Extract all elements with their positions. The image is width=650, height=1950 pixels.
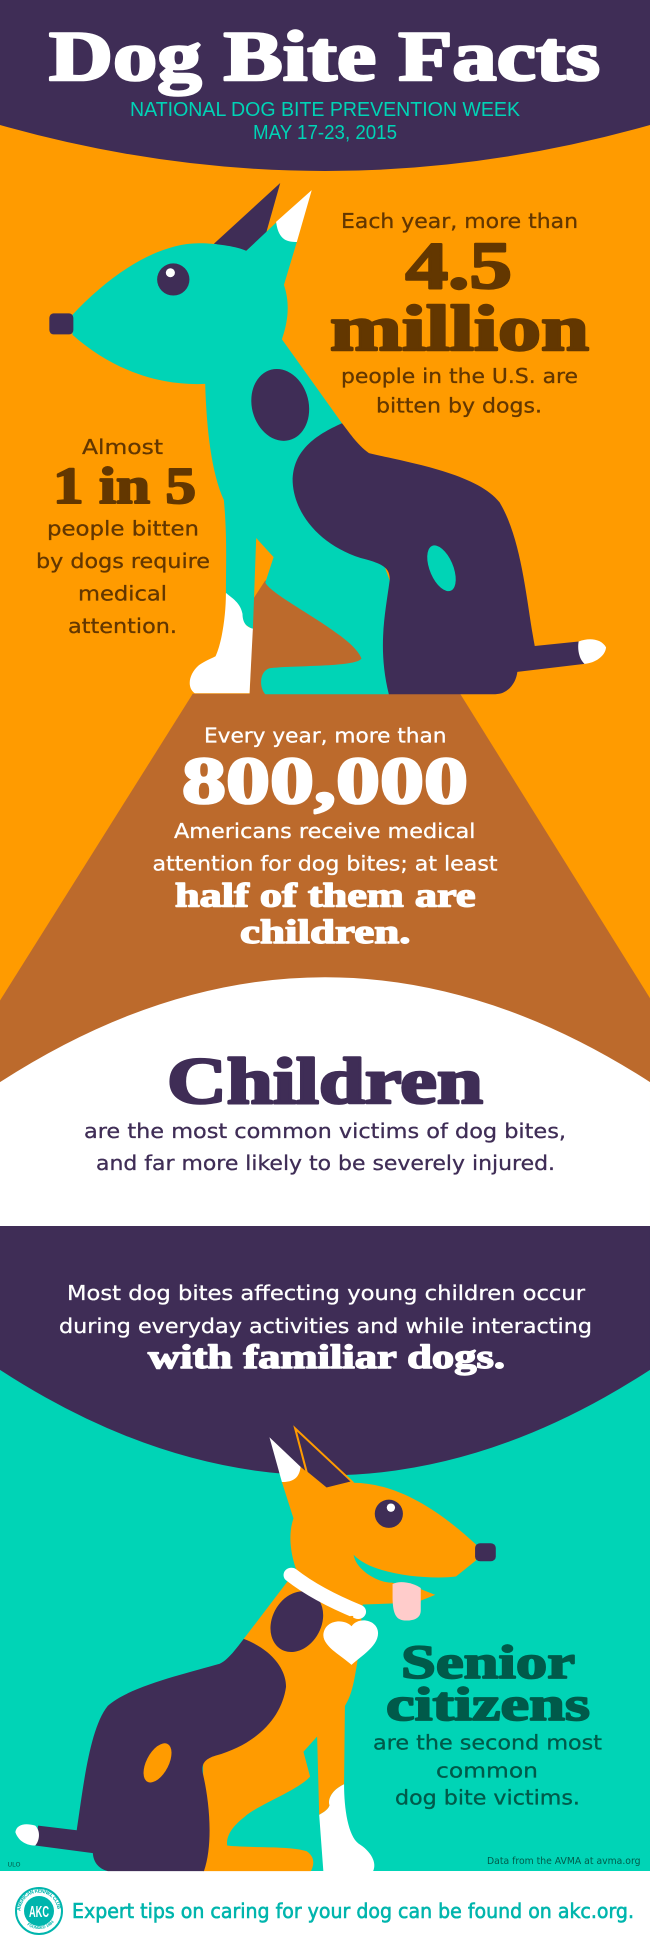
text block: 4.5 million: million (330, 293, 589, 365)
text block: 1 in 5: Almost (82, 435, 163, 459)
orange body (203, 1467, 476, 1871)
text block: senior citizens: citizens (386, 1678, 590, 1731)
front leg white sock (190, 593, 253, 693)
title: Dog Bite Facts (49, 18, 600, 96)
text block: familiar dogs: Most dog bites affecting young children occur (67, 1281, 586, 1305)
eye (157, 263, 189, 296)
orange background (0, 0, 650, 1300)
text block: senior citizens: common (436, 1758, 538, 1782)
near ear tip (269, 1437, 301, 1482)
front leg white sock (319, 1784, 374, 1871)
text block: 4.5 million (330, 209, 589, 418)
text block: children: Children (167, 1045, 483, 1118)
icon: AKC logo: AMERICAN KENNEL CLUB (17, 1889, 61, 1911)
subtitle: MAY 17-23, 2015 (253, 122, 397, 144)
subtitle: NATIONAL DOG BITE PREVENTION WEEK (130, 99, 521, 121)
footer text: Expert tips on caring for your dog can be found on akc.org. (72, 1899, 634, 1923)
eye highlight (166, 268, 175, 277)
text block: 800,000: half of them are (175, 878, 476, 915)
text block: children (84, 1045, 566, 1175)
hip spot (421, 541, 462, 596)
illustration: orange dog (15, 1428, 496, 1871)
text block: familiar dogs: with familiar dogs. (148, 1339, 505, 1376)
eye (375, 1500, 403, 1528)
eye highlight (387, 1503, 395, 1512)
text block: 1 in 5: 1 in 5 (53, 458, 196, 515)
text block: 1 in 5: by dogs require (36, 549, 210, 573)
tail tip (578, 639, 606, 664)
text block: senior citizens: Senior (401, 1636, 575, 1689)
icon: AKC logo: AKC (29, 1904, 49, 1921)
text block: 4.5 million: people in the U.S. are (341, 364, 578, 388)
text block: senior citizens (373, 1636, 602, 1810)
far ear (214, 183, 280, 251)
panel: footer (0, 1871, 650, 1950)
far ear (295, 1428, 352, 1489)
panel: brown triangle (0, 694, 650, 1082)
brown area between legs (250, 580, 373, 696)
text block: 1 in 5: people bitten (47, 517, 199, 541)
panel: purple section (0, 1226, 650, 1476)
text block: 800,000: attention for dog bites; at least (152, 852, 498, 876)
subtitle (130, 99, 521, 144)
purple body patch (293, 423, 585, 694)
tongue (393, 1582, 421, 1621)
source note: Data from the AVMA at avma.org (487, 1856, 640, 1867)
nose (475, 1543, 496, 1561)
tail tip (15, 1824, 39, 1846)
text block: 800,000: children. (240, 914, 410, 951)
illustration: teal dog (49, 183, 606, 696)
nose (49, 313, 73, 334)
near ear tip (276, 190, 312, 242)
panel: teal section (0, 1226, 650, 1871)
icon: AKC logo: FOUNDED 1884 (27, 1920, 54, 1929)
text block: senior citizens: are the second most (373, 1730, 602, 1754)
collar (291, 1575, 358, 1612)
text block: senior citizens: dog bite victims. (395, 1786, 580, 1810)
text block: children: and far more likely to be severely injured. (96, 1151, 555, 1175)
text block: 800,000: Every year, more than (204, 723, 446, 747)
credit: ULO (8, 1862, 21, 1869)
shoulder spot (242, 360, 318, 450)
text block: children: are the most common victims of dog bites, (84, 1119, 566, 1143)
text block: 4.5 million: Each year, more than (341, 209, 578, 233)
text block: 1 in 5 (36, 435, 210, 638)
panel: header (0, 0, 650, 171)
text block: 1 in 5: medical (78, 582, 167, 606)
icon: AKC logo (15, 1887, 63, 1935)
shoulder spot (261, 1584, 333, 1659)
text block: 1 in 5: attention. (68, 614, 177, 638)
text block: 4.5 million: bitten by dogs. (376, 394, 542, 418)
text block: familiar dogs (59, 1281, 592, 1376)
hip spot (138, 1739, 177, 1786)
panel: white children section (0, 977, 650, 1230)
teal body (73, 222, 390, 694)
purple body patch (35, 1639, 286, 1871)
text block: 800,000: Americans receive medical (174, 819, 476, 843)
text block: 4.5 million: 4.5 (406, 229, 512, 303)
text block: 800,000: 800,000 (182, 744, 468, 818)
text block: familiar dogs: during everyday activities and while interacting (59, 1314, 592, 1338)
heart tag (323, 1616, 378, 1665)
text block: 800,000 (152, 723, 498, 951)
